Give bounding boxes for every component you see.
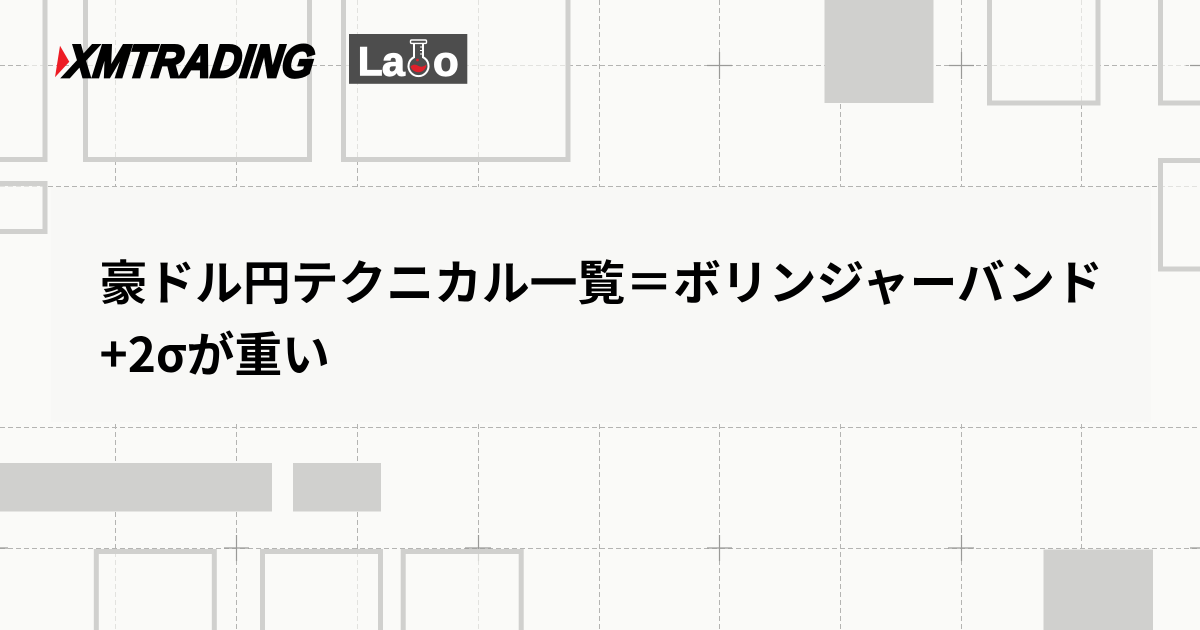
- logo: XMTRADING: XMTRADING: [61, 35, 318, 87]
- logo: Lab: [349, 34, 467, 84]
- title: 豪ドル円テクニカル一覧＝ボリンジャーバンド: [100, 245, 1103, 314]
- title: +2σが重い: [100, 317, 330, 386]
- title: [100, 245, 1103, 386]
- logo: Lab: o: [433, 38, 459, 84]
- logo: Lab: a: [382, 38, 406, 84]
- icon: flask: [408, 40, 428, 76]
- title panel: [51, 187, 1151, 422]
- logo: Lab: L: [358, 40, 382, 84]
